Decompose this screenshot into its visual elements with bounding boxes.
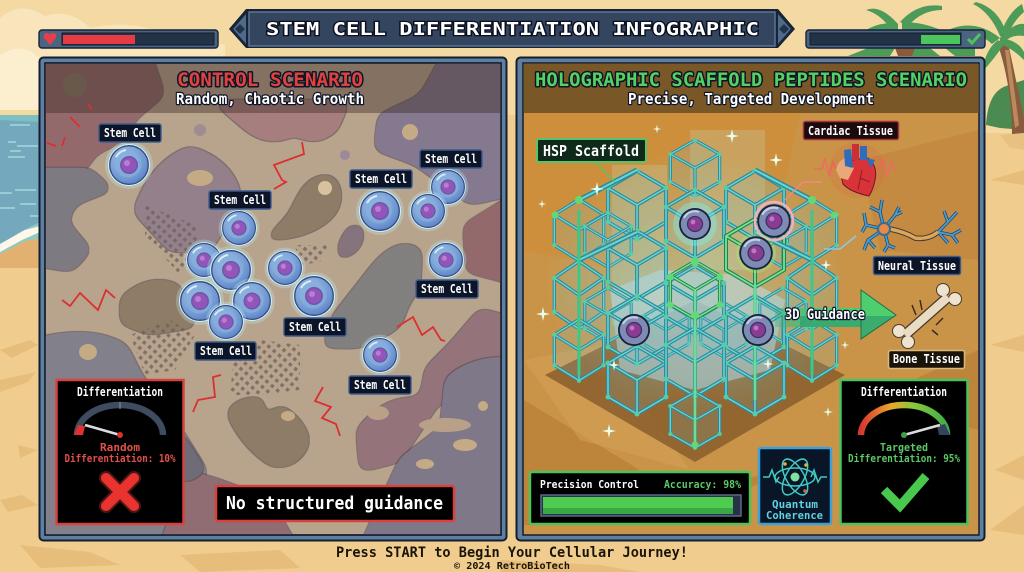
arrow: 3d guidance: 3D Guidance [785, 307, 865, 323]
title banner [229, 9, 795, 48]
gauge panel: random differentiation: Random [100, 441, 140, 454]
red cracks [47, 104, 445, 436]
panel: precision control: Precision Control [540, 478, 639, 491]
label: stem cell [350, 170, 412, 188]
panel frame inner [45, 63, 501, 535]
chaotic growth blobs [46, 64, 500, 534]
label: hsp scaffold [537, 139, 646, 182]
icon: red x [106, 478, 134, 506]
arrow: 3d guidance [775, 290, 896, 339]
footer: copyright: © 2024 RetroBioTech [454, 560, 570, 572]
panel: quantum coherence: Quantum [772, 498, 818, 511]
subheading: random growth: Random, Chaotic Growth [176, 90, 364, 108]
label: hsp scaffold: HSP Scaffold [543, 142, 639, 160]
gauge panel: random differentiation: Differentiation [77, 385, 163, 399]
label: bone tissue: Bone Tissue [893, 352, 960, 366]
stem cells [105, 141, 468, 375]
gauge [74, 402, 163, 438]
subheading: precise development: Precise, Targeted Development [628, 90, 874, 108]
gauge panel: targeted differentiation [840, 380, 968, 524]
panel: precision control [530, 472, 750, 524]
label: cardiac tissue: Cardiac Tissue [808, 124, 893, 138]
label: stem cell: Stem Cell [421, 282, 473, 296]
gauge panel: targeted differentiation: Differentiation: 95% [848, 452, 960, 465]
label: cardiac tissue [804, 122, 898, 140]
label: stem cell [284, 318, 346, 336]
callout: no structured guidance [216, 486, 454, 521]
panel: quantum coherence: Coherence [766, 509, 823, 522]
icon: neuron [824, 200, 961, 252]
label: neural tissue: Neural Tissue [878, 259, 956, 273]
sparkles [536, 125, 849, 438]
scaffold shadow [545, 300, 845, 462]
label: bone tissue [888, 350, 964, 368]
footer: call to action: Press START to Begin Your Cellular Journey! [336, 545, 688, 561]
header band [524, 64, 979, 113]
heading: control scenario: CONTROL SCENARIO [177, 69, 363, 91]
icon: heart [44, 33, 56, 45]
label: stem cell: Stem Cell [354, 378, 406, 392]
label: stem cell [420, 150, 482, 168]
icon: atom [763, 455, 827, 499]
label: stem cell [99, 124, 161, 142]
label: stem cell: Stem Cell [289, 320, 341, 334]
icon: check [968, 34, 980, 43]
icon: green check [884, 476, 926, 506]
gauge panel: random differentiation [56, 380, 184, 524]
label: stem cell [209, 191, 271, 209]
label: stem cell: Stem Cell [355, 172, 407, 186]
panel: control scenario [30, 50, 515, 550]
label: stem cell: Stem Cell [104, 126, 156, 140]
gauge panel: random differentiation: Differentiation: 10% [64, 452, 176, 465]
heading: hsp scenario: HOLOGRAPHIC SCAFFOLD PEPTIDES SCENARIO [535, 69, 967, 91]
panel: hsp scenario [516, 58, 984, 540]
label: stem cell [349, 376, 411, 394]
holographic scaffold lattice [552, 138, 839, 450]
gauge panel: targeted differentiation: Targeted [880, 441, 928, 454]
scaffold cells [618, 202, 793, 346]
scaffold glow [545, 150, 845, 410]
label: stem cell: Stem Cell [200, 344, 252, 358]
label: stem cell: Stem Cell [214, 193, 266, 207]
gauge [861, 405, 950, 438]
callout: no structured guidance: No structured guidance [226, 493, 443, 514]
title text: STEM CELL DIFFERENTIATION INFOGRAPHIC [266, 19, 759, 40]
light beams [612, 130, 765, 325]
icon: heart with ecg [785, 142, 898, 200]
halftone patches [130, 205, 330, 395]
panel: precision control: Accuracy: 98% [664, 478, 741, 491]
header band [46, 64, 501, 113]
health bar: high [806, 30, 985, 48]
palm trees [848, 2, 1024, 150]
panel: quantum coherence [759, 448, 831, 524]
health bar: low [39, 30, 218, 48]
label: stem cell [195, 342, 256, 360]
label: stem cell: Stem Cell [425, 152, 477, 166]
gauge panel: targeted differentiation: Differentiation [861, 385, 947, 399]
icon: bone [892, 284, 962, 348]
label: neural tissue [874, 256, 960, 274]
label: stem cell [416, 280, 478, 298]
